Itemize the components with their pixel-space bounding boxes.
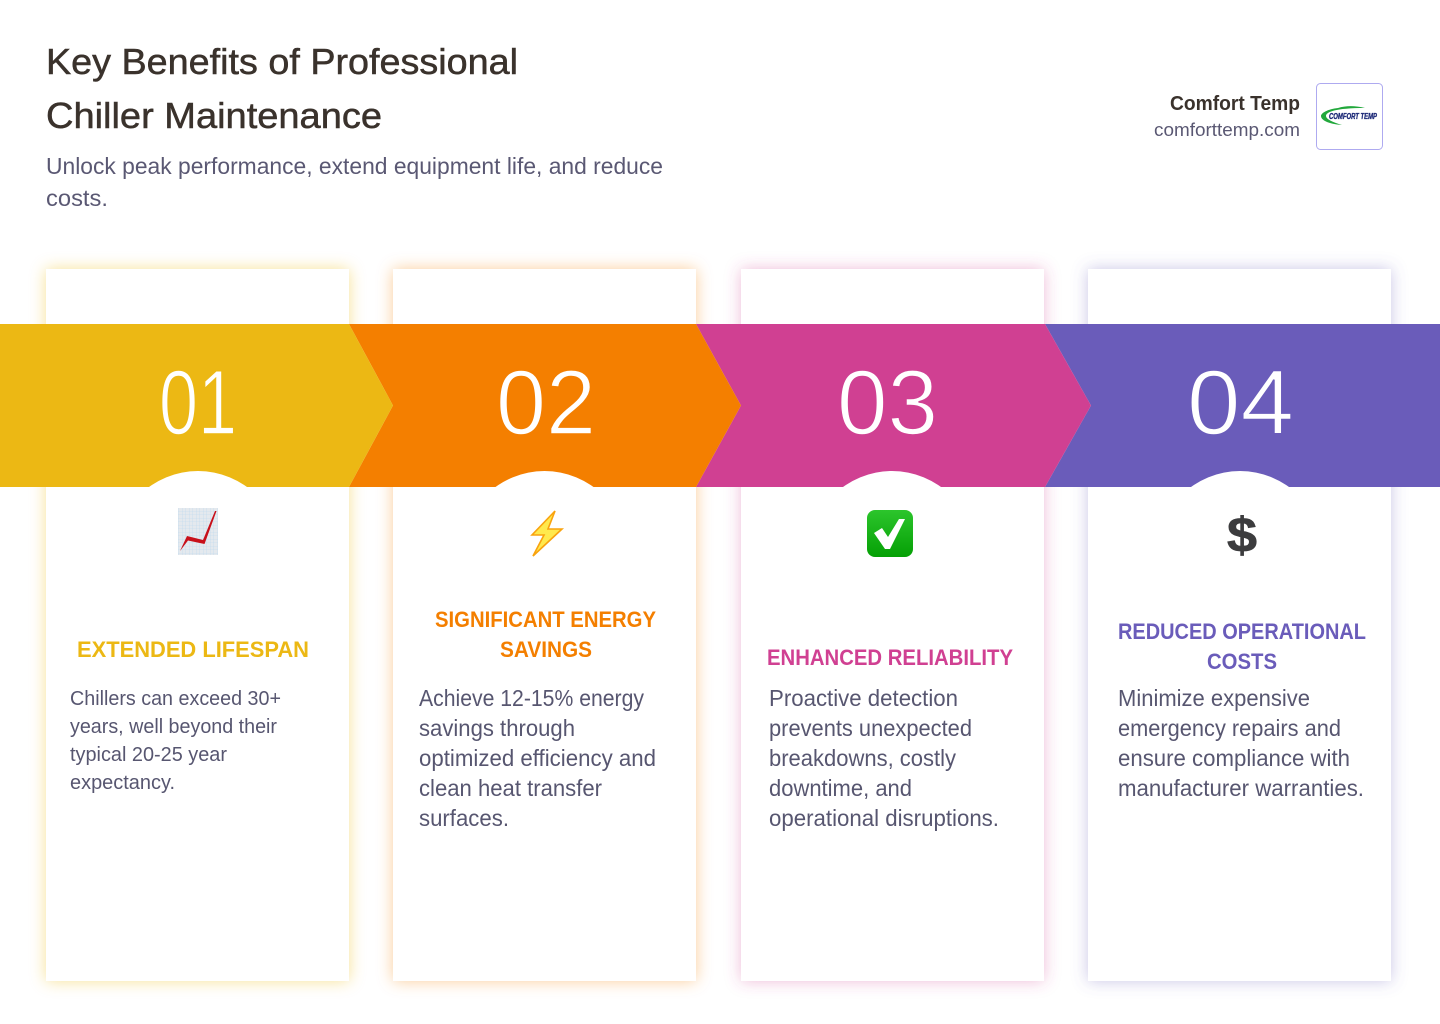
text: lifespan description: years, well beyond their — [70, 716, 277, 738]
text: lifespan description — [70, 688, 281, 794]
heading: extended lifespan: EXTENDED LIFESPAN — [77, 637, 309, 662]
text: energy description: surfaces. — [419, 805, 509, 831]
text: costs description: manufacturer warranties. — [1118, 775, 1364, 801]
subtitle — [46, 153, 663, 211]
arrow 04 — [1045, 324, 1440, 487]
heading: reduced operational costs: COSTS — [1207, 649, 1277, 674]
icon: green check mark — [867, 510, 913, 557]
icon: chart with upward trend — [178, 508, 218, 555]
title: Key Benefits of Professional — [46, 41, 518, 82]
text: reliability description — [769, 685, 999, 831]
arrow 03: 03 — [837, 352, 938, 454]
arrow 02: 02 — [496, 352, 596, 454]
brand logo: COMFORT TEMP — [1329, 112, 1377, 121]
text: reliability description: downtime, and — [769, 775, 912, 801]
heading: reduced operational costs — [1118, 619, 1366, 674]
arrow 04: 04 — [1187, 352, 1294, 454]
icon: lightning bolt — [532, 511, 562, 556]
panel: enhanced reliability — [741, 269, 1044, 981]
subtitle: costs. — [46, 185, 108, 211]
brand logo — [1316, 84, 1382, 150]
heading: significant energy savings: SIGNIFICANT ENERGY — [435, 607, 656, 632]
panel: significant energy savings — [393, 269, 696, 981]
text: reliability description: prevents unexpected — [769, 715, 972, 741]
text: lifespan description: Chillers can exceed 30+ — [70, 688, 281, 710]
panel: reduced operational costs — [1088, 269, 1391, 981]
icon: dollar sign: $ — [1227, 509, 1257, 563]
brand name: Comfort Temp — [1170, 93, 1300, 115]
heading: significant energy savings: SAVINGS — [500, 637, 592, 662]
text: energy description — [419, 685, 656, 831]
arrow 03 — [696, 324, 1091, 487]
arrow 02 — [349, 324, 741, 487]
arrow 01 — [0, 324, 393, 487]
text: energy description: clean heat transfer — [419, 775, 602, 801]
arrow 01: 01 — [159, 352, 237, 454]
text: energy description: Achieve 12-15% energy — [419, 685, 644, 711]
text: energy description: savings through — [419, 715, 575, 741]
text: costs description — [1118, 685, 1364, 801]
title — [46, 41, 518, 136]
text: reliability description: breakdowns, costly — [769, 745, 956, 771]
text: costs description: Minimize expensive — [1118, 685, 1310, 711]
title: Chiller Maintenance — [46, 95, 382, 136]
text: lifespan description: typical 20-25 year — [70, 744, 227, 766]
subtitle: Unlock peak performance, extend equipment life, and reduce — [46, 153, 663, 179]
heading: significant energy savings — [435, 607, 656, 662]
text: costs description: emergency repairs and — [1118, 715, 1341, 741]
text: costs description: ensure compliance with — [1118, 745, 1350, 771]
text: energy description: optimized efficiency and — [419, 745, 656, 771]
panel: extended lifespan — [46, 269, 349, 981]
arrow band — [0, 324, 1440, 487]
heading: enhanced reliability: ENHANCED RELIABILITY — [767, 645, 1013, 670]
brand block — [1154, 84, 1382, 150]
text: lifespan description: expectancy. — [70, 772, 175, 794]
text: reliability description: Proactive detection — [769, 685, 958, 711]
heading: reduced operational costs: REDUCED OPERATIONAL — [1118, 619, 1366, 644]
brand website: comforttemp.com — [1154, 119, 1300, 140]
text: reliability description: operational disruptions. — [769, 805, 999, 831]
